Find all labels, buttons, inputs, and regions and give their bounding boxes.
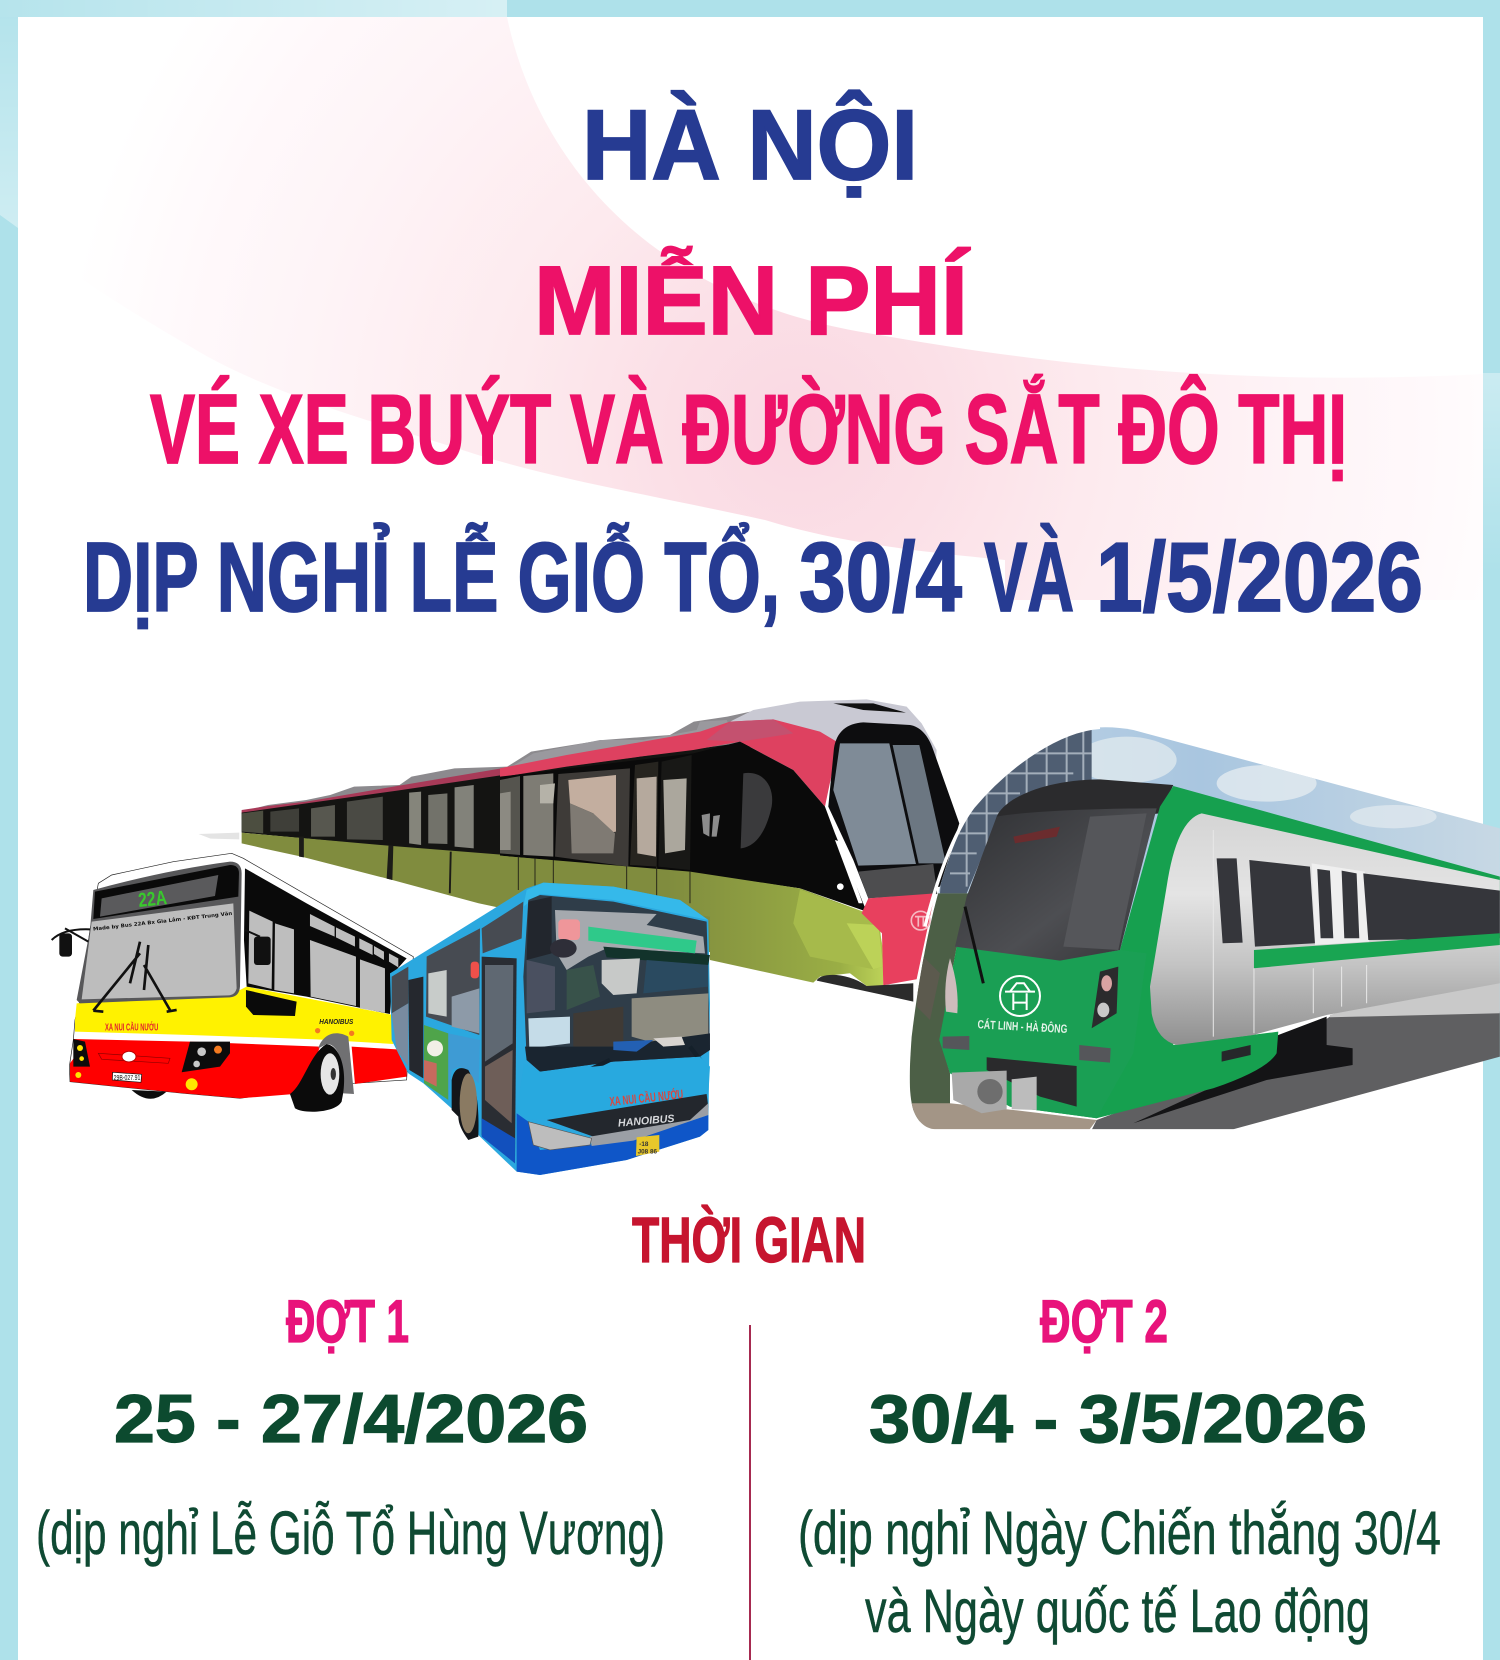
mirrors — [52, 928, 260, 942]
illustration: red-yellow Hanoi bus 22A: 29B-027.91 — [114, 1075, 140, 1082]
headlight — [528, 1122, 592, 1150]
column divider — [749, 1325, 751, 1660]
front lower panel — [517, 1057, 710, 1120]
trees — [910, 893, 968, 1122]
train front cab — [500, 699, 959, 1002]
illustration: blue Hanoi bus: -18 — [639, 1141, 649, 1148]
title: dịp nghỉ lễ: VÀ — [984, 522, 1074, 632]
bus body white base — [69, 853, 413, 1098]
red lower band — [70, 1039, 407, 1098]
destination board — [93, 865, 239, 919]
bus slogan: XA NUI CẦU NƯỚU — [105, 1021, 158, 1034]
title: dịp nghỉ lễ: DỊP NGHỈ LỄ GIỖ TỔ, — [83, 522, 780, 632]
office building — [940, 720, 1092, 893]
windows — [1217, 858, 1500, 947]
headlights — [945, 958, 958, 1013]
roof cap — [996, 779, 1174, 818]
sky — [900, 720, 1500, 953]
heading: ĐỢT 2 — [1040, 1288, 1168, 1355]
windscreen — [82, 903, 237, 999]
decorative pink crescent background — [227, 17, 1378, 600]
track ground — [1092, 1012, 1500, 1130]
side windows black — [244, 868, 407, 1014]
bumper — [517, 1113, 708, 1175]
front axle tyre — [132, 1090, 167, 1099]
green body — [939, 786, 1500, 1118]
heading: ĐỢT 1 — [286, 1288, 409, 1355]
illustration: blue Hanoi bus: HANOIBUS — [618, 1113, 675, 1130]
door frames — [1312, 863, 1369, 945]
windshield — [955, 808, 1157, 961]
illustration: blue Hanoi bus: J08 86 — [638, 1148, 657, 1155]
column 2: đợt 2 — [798, 1288, 1441, 1645]
illustration: red and olive light rail train — [199, 699, 959, 1002]
illustration: red-yellow Hanoi bus 22A — [52, 853, 413, 1112]
wheel — [452, 1068, 479, 1140]
green side stripe — [1254, 933, 1500, 968]
grille with brand — [547, 1094, 708, 1137]
plate — [112, 1072, 142, 1082]
note: (dịp nghỉ Lễ Giỗ Tổ Hùng Vương) — [36, 1499, 665, 1567]
windscreen sign text: Made by Bus 22A Bx Gia Lâm - KĐT Trung Văn — [93, 910, 233, 933]
destination sign — [588, 927, 697, 953]
side windows — [392, 902, 523, 1035]
bus silhouette — [390, 883, 710, 1175]
white arc outline — [925, 727, 1100, 927]
title: dịp nghỉ lễ: 1/5/2026 — [1096, 522, 1423, 632]
pavement — [912, 1103, 1096, 1130]
wheel and arch — [318, 1033, 354, 1094]
slogan on bus front: XA NUI CẦU NƯỚU — [609, 1086, 684, 1109]
side doors — [408, 977, 423, 1078]
plate — [636, 1135, 659, 1156]
Hanoi logo — [1000, 976, 1040, 1016]
windshield frame — [77, 862, 242, 1003]
title: Hà Nội: HÀ NỘI — [582, 89, 918, 200]
date range: 25 - 27/4/2026 — [114, 1381, 588, 1457]
line name: CÁT LINH - HÀ ĐÔNG — [977, 1016, 1068, 1036]
date range: 30/4 - 3/5/2026 — [869, 1381, 1367, 1457]
section heading: Thời gian: THỜI GIAN — [632, 1204, 866, 1276]
title: dịp nghỉ lễ: 30/4 — [799, 522, 962, 632]
silver carriage — [1150, 813, 1500, 1045]
windscreen — [523, 895, 710, 1072]
concrete platform — [1330, 983, 1500, 1018]
brand Hanoibus: HANOIBUS — [319, 1017, 353, 1026]
yellow band — [75, 987, 393, 1044]
windscreen reflections — [602, 958, 640, 995]
illustration: blue Hanoi bus — [390, 883, 710, 1175]
wipers — [93, 942, 177, 1012]
door lines — [1213, 830, 1367, 1037]
roof highlight — [523, 883, 708, 920]
lights and grille — [73, 1039, 230, 1072]
column 1: đợt 1 — [36, 1288, 665, 1567]
illustration: green Cat Linh - Ha Dong metro train — [900, 720, 1500, 1153]
clouds — [1092, 736, 1176, 782]
coupler — [987, 1057, 1077, 1107]
front grilles — [943, 1036, 1111, 1063]
route number 22A: 22A — [137, 887, 168, 912]
passenger windows — [500, 776, 520, 855]
train rear carriages — [199, 712, 750, 967]
side panel livery — [392, 1003, 408, 1067]
title: Miễn phí: MIỄN PHÍ — [534, 246, 971, 355]
